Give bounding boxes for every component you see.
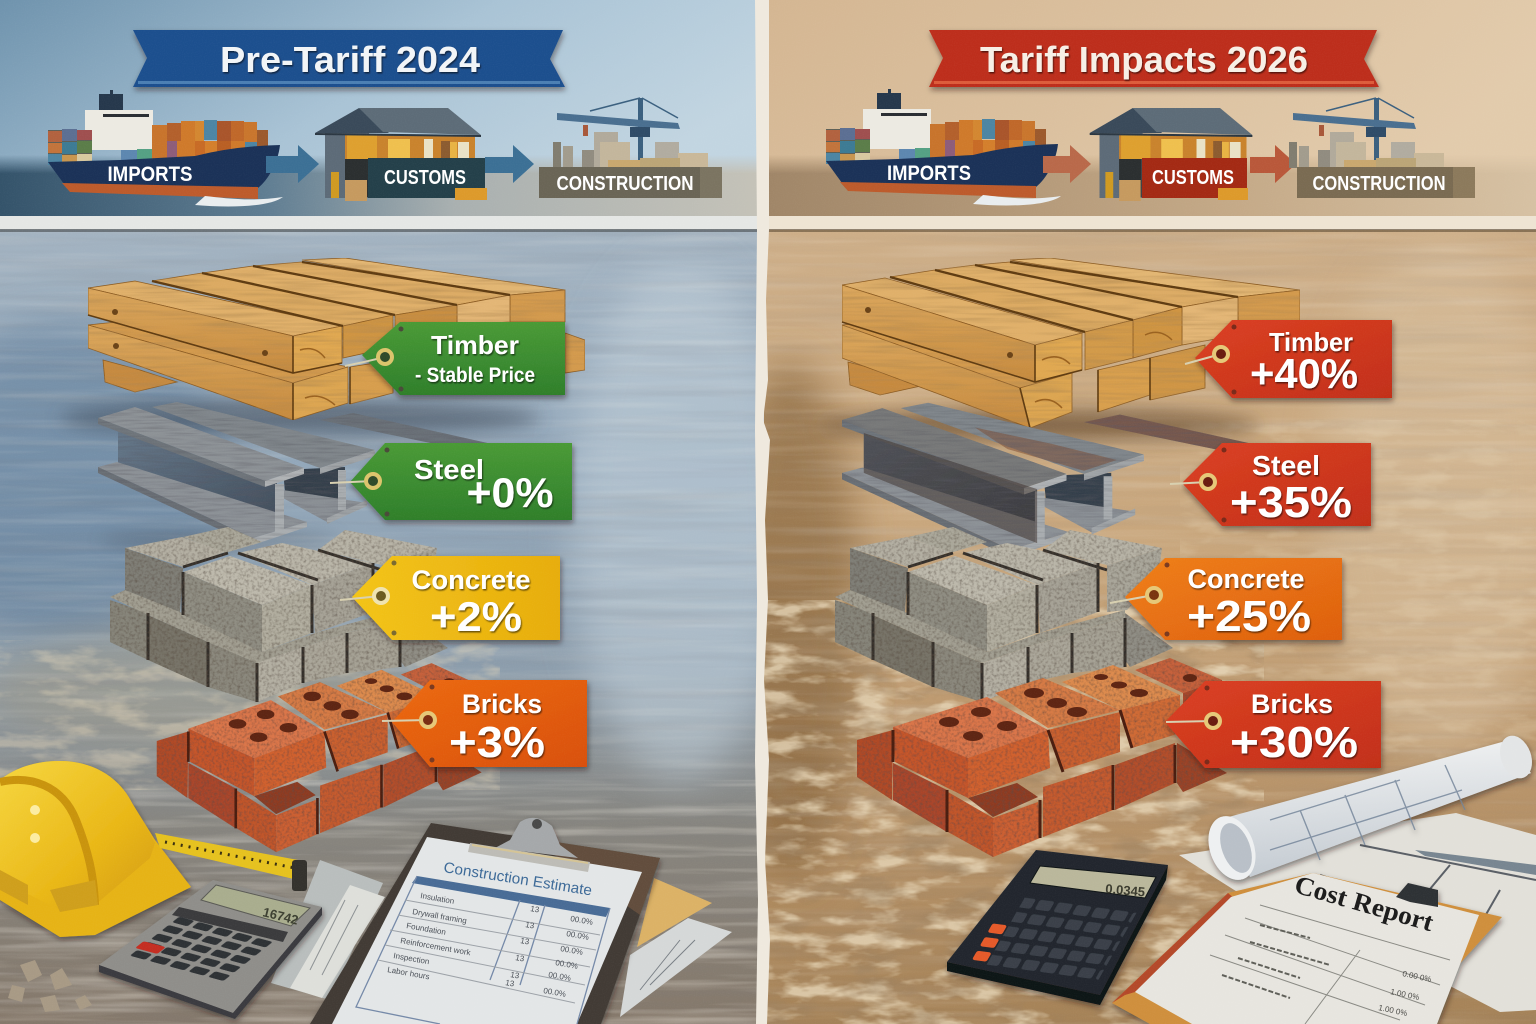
tag: Concrete +25% xyxy=(1110,558,1342,641)
header separator strip xyxy=(0,216,1536,232)
icon: yellow hard hat xyxy=(0,761,191,937)
papers behind calculator xyxy=(271,860,385,1000)
tag: Concrete +2%: Concrete xyxy=(412,565,530,595)
material: steel beams pre-tariff xyxy=(98,402,492,545)
arrow: customs to construction xyxy=(485,145,534,183)
tag: Steel +35% xyxy=(1170,443,1371,527)
estimate sheet: Drywall framing xyxy=(412,907,468,926)
estimate sheet: 00.0% xyxy=(560,944,584,957)
material: concrete blocks pre-tariff xyxy=(110,527,448,702)
material: steel beams tariff xyxy=(842,403,1271,557)
estimate sheet: Inspection xyxy=(393,951,430,966)
arrow: customs to construction xyxy=(1250,145,1296,183)
tag: Steel +35%: Steel xyxy=(1252,450,1320,481)
ship: imports xyxy=(48,90,283,206)
shadow under tariff timber xyxy=(820,409,1260,441)
cost report sheet: 1.00 0% xyxy=(1390,987,1420,1002)
icon: calculator pre-tariff: 16742 xyxy=(261,904,300,928)
flow: tariff supply chain xyxy=(826,89,1475,205)
tag: Bricks +3% xyxy=(382,680,587,767)
construction site xyxy=(539,98,722,198)
estimate sheet: Labor hours xyxy=(387,965,430,981)
tag: Bricks +3%: Bricks xyxy=(462,689,542,719)
warehouse: customs xyxy=(315,108,487,201)
tag: Steel +0% xyxy=(330,443,572,520)
ship: imports: IMPORTS xyxy=(108,163,192,186)
tag: Concrete +2% xyxy=(340,556,560,640)
tag: Steel +0%: +0% xyxy=(466,469,554,516)
tag: Concrete +25%: Concrete xyxy=(1188,564,1304,594)
cost report sheet: 1.00 0% xyxy=(1378,1003,1408,1018)
tag: Timber stable price xyxy=(345,322,565,395)
estimate sheet: 13 xyxy=(520,936,531,947)
icon: measuring tape xyxy=(155,833,307,891)
rubble pebbles xyxy=(8,960,92,1012)
panel: tariff header background xyxy=(768,0,1536,216)
icon: calculator tariff xyxy=(947,850,1168,1005)
cost report sheet: 0.00 0% xyxy=(1402,969,1432,984)
timber gaps and end grain tariff xyxy=(842,262,1238,428)
tag: Steel +35%: +35% xyxy=(1230,478,1352,527)
panel: tariff materials background xyxy=(720,230,1536,1024)
estimate sheet: 13 xyxy=(505,978,516,989)
banner: Tariff Impacts 2026: Tariff Impacts 2026 xyxy=(980,39,1308,80)
tag: Timber +40% xyxy=(1185,320,1392,398)
material: bricks tariff xyxy=(857,658,1227,857)
material: concrete blocks tariff xyxy=(835,527,1173,702)
arrow: imports to customs xyxy=(266,145,319,183)
warehouse: customs: CUSTOMS xyxy=(384,167,466,189)
banner: Tariff Impacts 2026 xyxy=(929,30,1379,87)
shadow under pre-tariff timber xyxy=(60,400,540,436)
tag: Concrete +2%: +2% xyxy=(430,593,522,640)
material: timber stack tariff xyxy=(842,258,1300,428)
ship: imports xyxy=(826,89,1061,205)
tag: Timber +40%: +40% xyxy=(1250,350,1358,397)
construction site: CONSTRUCTION xyxy=(556,173,694,195)
material: bricks pre-tariff xyxy=(157,663,482,852)
estimate sheet xyxy=(332,837,642,1024)
tag: Bricks +30%: Bricks xyxy=(1251,689,1333,719)
tag: Bricks +30% xyxy=(1165,681,1381,768)
panel: pre-tariff header background xyxy=(0,0,757,216)
binder clip xyxy=(1396,883,1438,907)
icon: calculator pre-tariff xyxy=(99,880,322,1019)
estimate sheet: 00.0% xyxy=(570,914,594,927)
tag: Concrete +25%: +25% xyxy=(1187,592,1311,641)
clipboard: cost report xyxy=(1112,870,1502,1024)
timber knots pre-tariff xyxy=(112,309,268,356)
icon: calculator tariff: 0.0345 xyxy=(1105,881,1146,899)
construction site: CONSTRUCTION xyxy=(1312,173,1446,195)
arrow: imports to customs xyxy=(1043,145,1091,183)
ship: imports: IMPORTS xyxy=(887,162,971,185)
estimate sheet: Construction Estimate xyxy=(442,859,593,899)
estimate sheet: 13 xyxy=(525,920,536,931)
flow: pre-tariff supply chain xyxy=(48,90,722,206)
tag: Steel +0%: Steel xyxy=(414,454,484,485)
icon: rolled blueprint xyxy=(1200,731,1536,887)
estimate sheet: 00.0% xyxy=(543,986,567,999)
warehouse: customs xyxy=(1090,108,1252,201)
material: timber stack pre-tariff xyxy=(88,258,585,420)
tag: Timber +40%: Timber xyxy=(1269,327,1353,357)
tag: Timber stable price: Timber xyxy=(431,330,519,360)
panel: pre-tariff materials background xyxy=(0,230,790,1024)
banner: Pre-Tariff 2024: Pre-Tariff 2024 xyxy=(220,39,480,80)
cost report sheet: Cost Report xyxy=(1291,870,1437,937)
estimate sheet: 00.0% xyxy=(548,970,572,983)
tag: Timber stable price: - Stable Price xyxy=(415,364,535,387)
estimate sheet: Foundation xyxy=(406,921,447,937)
banner: Pre-Tariff 2024 xyxy=(133,30,565,87)
papers under cost report xyxy=(1179,813,1536,1012)
shadow under pre-tariff steel xyxy=(100,532,340,548)
estimate sheet: 00.0% xyxy=(555,958,579,971)
construction site xyxy=(1289,98,1475,198)
estimate sheet: 00.0% xyxy=(566,929,590,942)
torn paper divider xyxy=(755,0,770,1024)
papers right of clipboard xyxy=(620,878,732,1017)
tag: Bricks +30%: +30% xyxy=(1230,718,1358,767)
metal clip xyxy=(468,818,590,872)
estimate sheet: 13 xyxy=(510,970,521,981)
warehouse: customs: CUSTOMS xyxy=(1152,167,1234,189)
tag: Bricks +3%: +3% xyxy=(449,718,545,767)
cost report sheet xyxy=(1135,870,1479,1024)
clipboard: construction estimate xyxy=(310,818,660,1024)
estimate sheet: 13 xyxy=(515,953,526,964)
timber gaps and end grain pre-tariff xyxy=(88,262,510,420)
estimate sheet: Insulation xyxy=(420,891,455,906)
estimate sheet: Reinforcement work xyxy=(400,936,472,957)
estimate sheet: 13 xyxy=(530,904,541,915)
timber knots tariff xyxy=(865,307,1013,358)
